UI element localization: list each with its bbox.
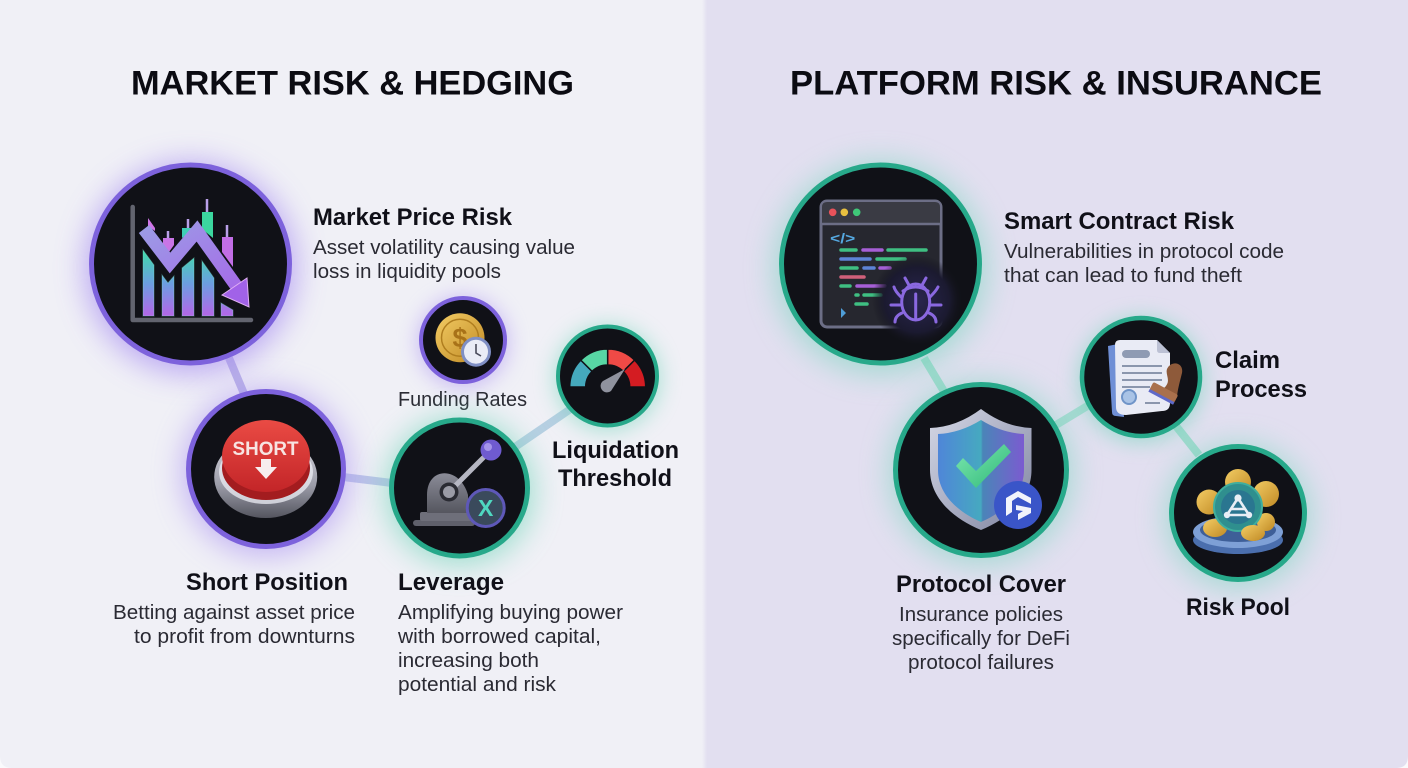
node: funding rates icon: $	[452, 323, 468, 353]
node: market price risk icon	[84, 162, 296, 374]
label: leverage	[397, 569, 623, 696]
node: leverage icon: X	[478, 495, 494, 521]
node: claim process icon	[1078, 317, 1204, 443]
panel: platform risk and insurance	[702, 0, 1408, 768]
title: market risk: MARKET RISK & HEDGING	[131, 64, 574, 102]
label: risk pool: Risk Pool	[1186, 594, 1290, 621]
panel: market risk and hedging	[0, 0, 702, 768]
label: claim process: Claim	[1215, 347, 1280, 374]
label: protocol cover	[892, 571, 1070, 674]
label: leverage: Leverage	[398, 569, 504, 596]
connector: market to short	[229, 358, 245, 396]
node: leverage icon	[386, 417, 534, 565]
node: liquidation threshold icon	[554, 324, 662, 432]
connector: short to leverage	[343, 477, 392, 483]
label: protocol cover: Insurance policies	[899, 604, 1063, 626]
connector: protocol cover to claim	[1056, 405, 1089, 425]
label: market price risk: loss in liquidity pools	[313, 261, 501, 283]
label: short position: to profit from downturns	[134, 626, 355, 648]
label: short position	[113, 569, 355, 648]
node: short position icon	[182, 388, 350, 556]
label: liquidation threshold: Liquidation	[552, 437, 679, 464]
label: claim process	[1215, 347, 1307, 403]
label: market price risk: Asset volatility causing value	[313, 237, 575, 259]
label: market price risk: Market Price Risk	[313, 204, 513, 231]
code tag: </>	[830, 230, 855, 246]
label: leverage: increasing both	[398, 650, 539, 672]
label: funding rates: Funding Rates	[398, 389, 527, 411]
label: short position: Betting against asset price	[113, 602, 355, 624]
label: claim process: Process	[1215, 376, 1307, 403]
label: protocol cover: Protocol Cover	[896, 571, 1066, 598]
label: smart contract risk	[1004, 208, 1284, 287]
button text: SHORT	[232, 439, 299, 460]
label: liquidation threshold: Threshold	[558, 465, 672, 492]
title: platform risk: PLATFORM RISK & INSURANCE	[790, 64, 1322, 102]
connector: smart contract to protocol cover	[924, 358, 945, 393]
label: smart contract risk: that can lead to fund theft	[1004, 265, 1242, 287]
connector: leverage to liquidation	[515, 408, 572, 447]
label: liquidation threshold	[552, 437, 679, 492]
label: leverage: with borrowed capital,	[397, 626, 601, 648]
label: leverage: Amplifying buying power	[398, 602, 623, 624]
node: funding rates icon	[417, 296, 509, 388]
label: market price risk	[313, 204, 575, 283]
label: smart contract risk: Smart Contract Risk	[1004, 208, 1235, 235]
node: risk pool icon	[1166, 444, 1310, 588]
node: smart contract risk icon	[774, 162, 986, 374]
label: protocol cover: protocol failures	[908, 652, 1054, 674]
connector: claim to risk pool	[1176, 426, 1199, 455]
label: protocol cover: specifically for DeFi	[892, 628, 1070, 650]
node: protocol cover icon	[890, 382, 1072, 564]
label: leverage: potential and risk	[398, 674, 557, 696]
label: smart contract risk: Vulnerabilities in protocol code	[1004, 241, 1284, 263]
label: short position: Short Position	[186, 569, 348, 596]
